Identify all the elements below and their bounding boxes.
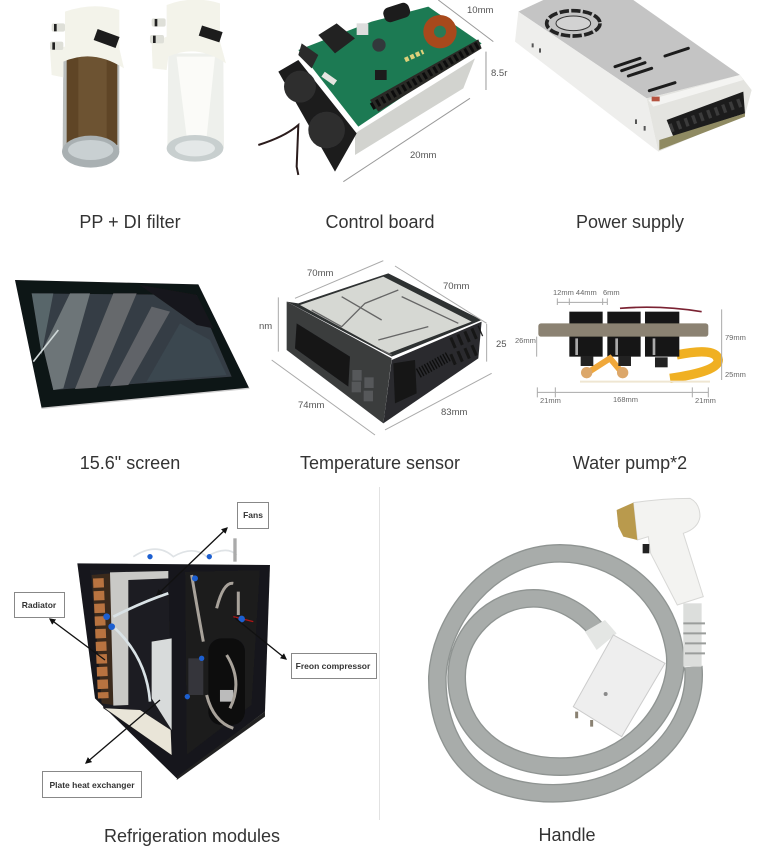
icon: temperature sensor photo: 74mm xyxy=(298,400,324,411)
icon: temperature sensor photo: 70mm xyxy=(307,268,333,279)
caption: Refrigeration modules: Refrigeration modules xyxy=(104,826,280,846)
icon: temperature sensor photo: nm xyxy=(259,321,272,332)
caption: 15.6" screen: 15.6" screen xyxy=(80,453,180,473)
icon: refrigeration module photo xyxy=(77,538,270,780)
callout: Freon compressor xyxy=(235,618,376,678)
icon: control board photo: 8.5r xyxy=(491,68,507,79)
icon: control board photo: 20mm xyxy=(410,150,436,161)
callout: Radiator xyxy=(14,592,105,660)
icon: 15.6 inch screen photo xyxy=(15,280,249,408)
caption: Control board: Control board xyxy=(325,212,435,232)
icon: water pump photo: 21mm xyxy=(540,396,561,405)
icon: water pump photo xyxy=(515,288,746,405)
callout: Freon compressor: Freon compressor xyxy=(296,661,371,671)
icon: water pump photo: 168mm xyxy=(613,395,638,404)
icon: water pump photo: 12mm 44mm xyxy=(553,288,597,297)
icon: water pump photo: 6mm xyxy=(603,288,620,297)
divider xyxy=(378,487,380,820)
icon: temperature sensor photo xyxy=(259,261,507,435)
caption: Temperature sensor: Temperature sensor xyxy=(300,453,460,473)
icon: control board photo xyxy=(258,0,507,182)
icon: temperature sensor photo: 25 xyxy=(496,339,507,350)
callout: Plate heat exchanger xyxy=(42,700,160,798)
callout: Fans xyxy=(157,502,268,595)
icon: temperature sensor photo: 83mm xyxy=(441,407,467,418)
icon: water pump photo: 79mm xyxy=(725,333,746,342)
caption: Water pump*2: Water pump*2 xyxy=(573,453,687,473)
caption: Power supply: Power supply xyxy=(576,212,684,232)
caption: Handle: Handle xyxy=(538,825,596,845)
callout: Plate heat exchanger: Plate heat exchanger xyxy=(49,780,135,790)
icon: handle photo xyxy=(437,498,706,793)
caption: PP + DI filter: PP + DI filter xyxy=(79,212,181,232)
icon: temperature sensor photo: 70mm xyxy=(443,281,469,292)
callout: Radiator: Radiator xyxy=(22,600,57,610)
icon: water pump photo: 26mm xyxy=(515,336,536,345)
icon: power supply photo xyxy=(515,0,752,152)
icon: PP + DI filter photo xyxy=(50,0,226,168)
icon: water pump photo: 25mm xyxy=(725,370,746,379)
icon: water pump photo: 21mm xyxy=(695,396,716,405)
icon: control board photo: 10mm xyxy=(467,5,493,16)
callout: Fans: Fans xyxy=(243,510,263,520)
